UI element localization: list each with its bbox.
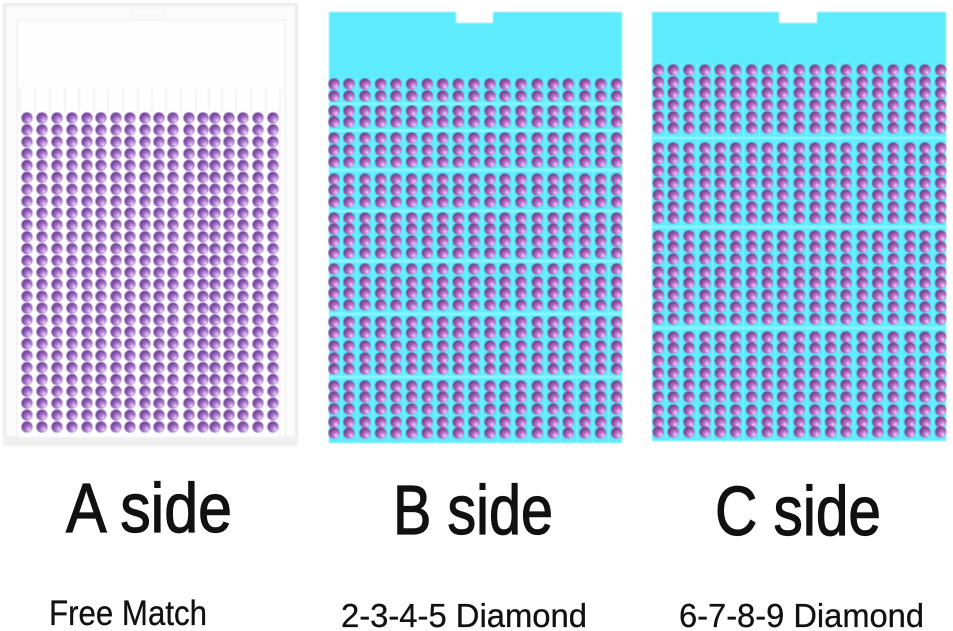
bead grid: free match <box>21 112 279 433</box>
tray frame <box>3 3 298 446</box>
panel: C side tray <box>652 12 946 441</box>
panel: A side tray <box>3 3 298 446</box>
grid separators <box>329 77 622 443</box>
heading: B side: B side <box>393 471 553 549</box>
bead grid: 6-7-8-9 rows <box>653 64 946 438</box>
heading: C side: C side <box>715 472 881 550</box>
tray body with notch <box>329 12 622 443</box>
tray slots <box>20 88 280 440</box>
grid separators <box>652 62 946 441</box>
bead grid: 2-3-4-5 rows <box>328 78 622 439</box>
panel: B side tray <box>328 12 622 443</box>
heading: A side: A side <box>66 469 232 547</box>
tray body with notch <box>652 12 946 441</box>
